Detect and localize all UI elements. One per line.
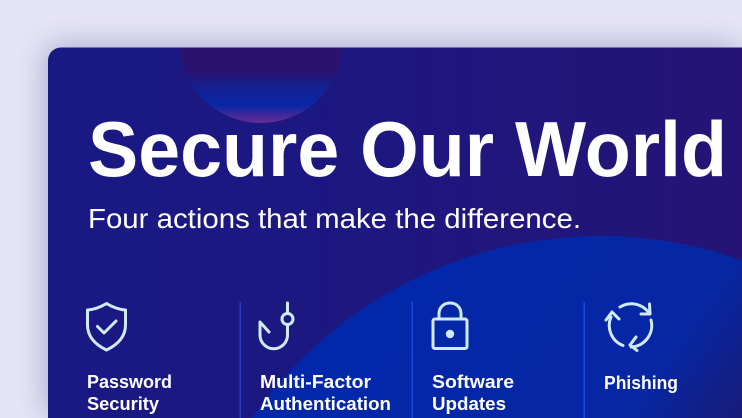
item: software updates [432,303,514,414]
item: multi-factor authentication [260,303,391,414]
label: Multi-Factor Authentication: Authentication [260,394,391,414]
divider 3 [584,302,585,418]
subtitle: Four actions that make the difference. [88,203,581,234]
item: phishing [604,304,678,393]
label: Password Security [87,372,172,414]
label: Software Updates [432,372,514,414]
label: Software Updates: Software [432,372,514,392]
icon: padlock [433,303,467,348]
label: Password Security: Security [87,394,159,414]
icon: fish hook [260,303,293,349]
icon: shield with check [88,304,126,350]
label: Password Security: Password [87,372,172,392]
label: Phishing: Phishing [604,373,678,393]
item: password security [87,304,172,414]
decorative large circle [252,236,742,418]
divider 1 [240,302,241,418]
divider 2 [412,302,413,418]
title: Secure Our World [88,105,727,193]
decorative small circle [179,48,343,123]
label: Software Updates: Updates [432,394,506,414]
label: Multi-Factor Authentication: Multi-Factor [260,372,371,392]
label: Multi-Factor Authentication [260,372,391,414]
icon: cycle arrows [606,304,652,350]
